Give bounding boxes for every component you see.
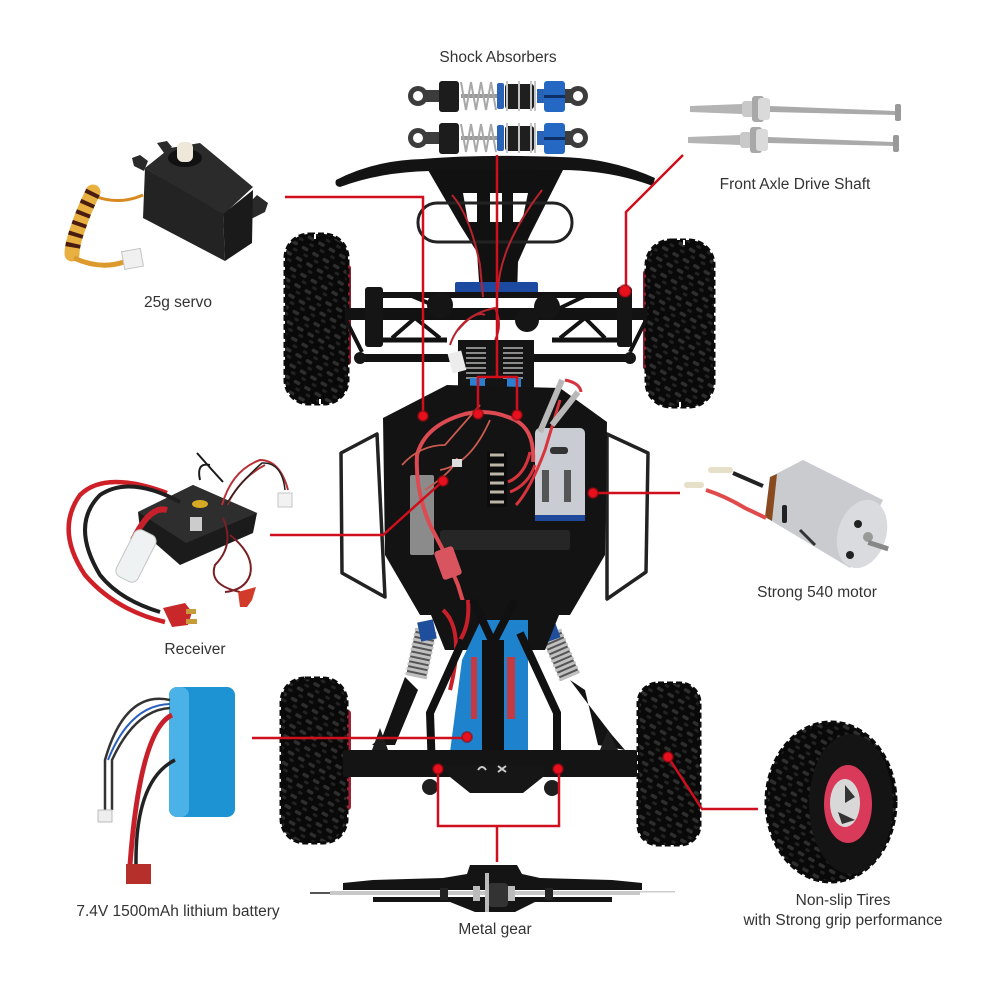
icon: shock absorber top <box>408 81 588 112</box>
leader lines <box>252 155 758 862</box>
icon: shock absorber bottom <box>408 123 588 154</box>
label: battery: 7.4V 1500mAh lithium battery <box>76 903 280 920</box>
thin wires <box>402 405 490 490</box>
car receiver connector <box>452 459 462 467</box>
rear chassis <box>425 600 565 650</box>
motor wires <box>508 400 560 505</box>
front left tire <box>285 234 351 404</box>
plate holes <box>463 193 528 222</box>
side nerf bar right <box>607 434 648 599</box>
front right tire <box>643 240 714 407</box>
label: drive shaft: Front Axle Drive Shaft <box>720 176 871 193</box>
label: servo: 25g servo <box>144 294 212 311</box>
main chassis plate <box>383 385 607 615</box>
car chassis <box>281 156 714 845</box>
icon: receiver <box>69 453 292 627</box>
label: metal gear: Metal gear <box>458 921 532 938</box>
icon: drive shafts <box>688 96 901 153</box>
side nerf bar left <box>341 434 385 597</box>
center shocks <box>458 340 534 395</box>
heading: shock absorbers: Shock Absorbers <box>439 49 557 66</box>
label: tire detail: with Strong grip performance <box>742 912 943 929</box>
blue steering bar <box>455 282 538 293</box>
front wires <box>450 190 542 345</box>
car battery <box>450 620 528 752</box>
icon: metal gear axle <box>310 865 675 912</box>
label: tire: Non-slip Tires <box>796 892 891 909</box>
label: motor: Strong 540 motor <box>757 584 877 601</box>
motor <box>535 428 585 521</box>
differential <box>440 765 545 793</box>
rear left tire <box>281 678 351 843</box>
diff detail <box>478 766 506 772</box>
label: receiver: Receiver <box>164 641 226 658</box>
icon: servo <box>72 141 268 269</box>
rear right tire <box>638 683 700 845</box>
white connector <box>448 351 466 373</box>
front bumper <box>336 156 655 187</box>
terminal strip <box>487 452 507 507</box>
rear towers <box>372 677 625 750</box>
axle feet <box>372 728 618 796</box>
red battery wires <box>443 600 468 690</box>
front plate <box>428 170 563 296</box>
leader dots <box>418 285 673 774</box>
icon: motor <box>684 460 896 575</box>
rear axle <box>343 750 637 777</box>
suspension blocks <box>354 287 636 364</box>
main red wire <box>417 412 533 618</box>
front suspension <box>345 295 647 358</box>
motor clips <box>540 380 578 432</box>
icon: battery <box>98 687 235 884</box>
rear brace <box>430 600 557 770</box>
bumper loop <box>418 203 572 242</box>
rear shocks <box>416 621 570 677</box>
power connector <box>433 545 463 581</box>
drum <box>440 530 570 550</box>
grey metal plate <box>410 475 434 555</box>
icon: tire <box>766 722 896 882</box>
